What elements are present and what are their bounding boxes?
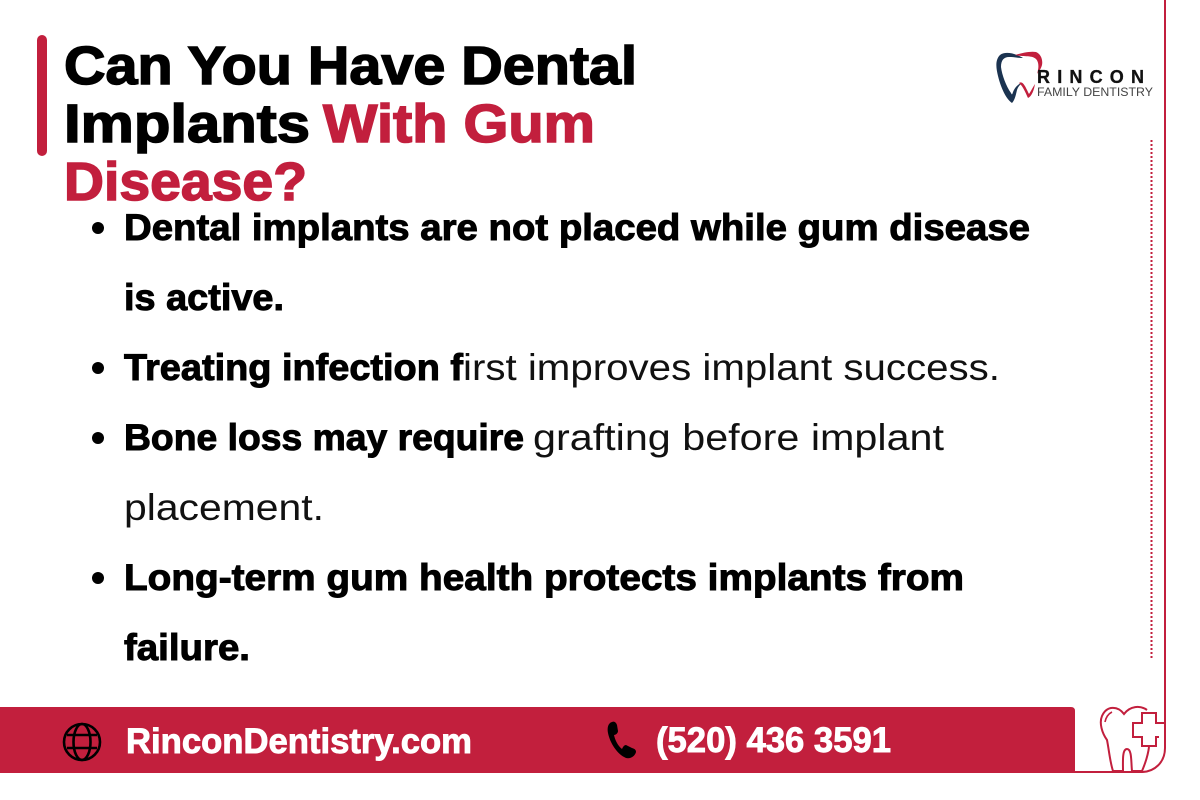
title: Disease? xyxy=(64,152,307,212)
bullet 3: grafting before implant xyxy=(533,417,945,458)
bullet 3: Bone loss may require xyxy=(124,417,524,458)
icon: tooth logo xyxy=(996,52,1042,103)
logo xyxy=(996,52,1153,103)
phone number: (520) 436 3591 xyxy=(656,721,891,760)
bullet list xyxy=(92,207,1030,668)
bullet 4: Long-term gum health protects implants from xyxy=(124,557,964,598)
bullet 3 xyxy=(92,417,945,528)
bullet 2: Treating infection f xyxy=(124,347,464,388)
website: RinconDentistry.com xyxy=(126,722,472,761)
title xyxy=(64,36,637,212)
bullet 1: is active. xyxy=(124,277,284,318)
page frame line xyxy=(1070,0,1165,772)
title accent bar xyxy=(37,35,47,156)
bullet 1: Dental implants are not placed while gum disease xyxy=(124,207,1030,248)
dotted vertical line xyxy=(1150,140,1152,658)
title: Implants xyxy=(64,94,310,154)
icon: tooth with cross xyxy=(1101,707,1165,771)
logo tagline: FAMILY DENTISTRY xyxy=(1037,87,1153,99)
footer band xyxy=(0,707,1075,773)
bullet 4 xyxy=(92,557,964,668)
bullet 4: failure. xyxy=(124,627,250,668)
title: With Gum xyxy=(323,94,595,154)
bullet 2: irst improves implant success. xyxy=(463,347,1000,388)
icon: globe xyxy=(64,724,100,760)
title: Can You Have Dental xyxy=(64,36,637,96)
bullet 1 xyxy=(92,207,1030,318)
logo wordmark: RINCON xyxy=(1037,67,1144,87)
icon: phone xyxy=(608,722,636,758)
bullet 2 xyxy=(92,347,1000,388)
bullet 3: placement. xyxy=(124,487,324,528)
